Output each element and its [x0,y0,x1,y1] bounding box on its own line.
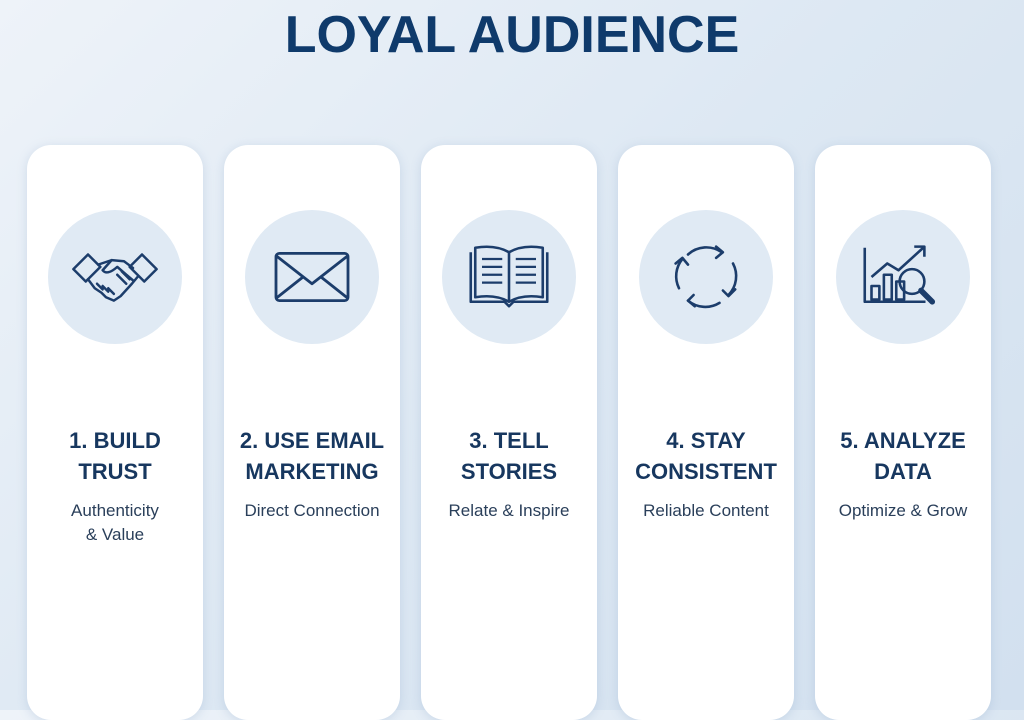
panel: analyze [815,145,991,720]
heading: CONSISTENT [635,459,777,484]
subtext: Authenticity [71,501,159,520]
heading: 5. ANALYZE [840,428,966,453]
subtext: Direct Connection [244,501,380,520]
subtext [71,501,159,544]
heading: DATA [874,459,932,484]
heading: STORIES [461,459,557,484]
heading [635,428,777,484]
panel: email [224,145,400,720]
heading: 1. BUILD [69,428,161,453]
panel: consistent [618,145,794,720]
heading: 4. STAY [666,428,746,453]
subtext: Relate & Inspire [449,501,569,520]
panel: build trust [27,145,203,720]
title: LOYAL AUDIENCE [285,6,739,64]
heading [240,428,384,484]
subtext: & Value [86,525,144,544]
heading: MARKETING [245,459,379,484]
heading [461,428,557,484]
heading: 3. TELL [469,428,549,453]
heading: TRUST [78,459,152,484]
heading: 2. USE EMAIL [240,428,384,453]
icon: handshake [48,210,182,344]
icon: chart with magnifier [836,210,970,344]
heading [840,428,966,484]
subtext: Optimize & Grow [839,501,967,520]
subtext: Reliable Content [643,501,769,520]
icon: envelope [245,210,379,344]
icon: cycle arrows [639,210,773,344]
panel: stories [421,145,597,720]
icon: book [442,210,576,344]
heading [69,428,161,484]
